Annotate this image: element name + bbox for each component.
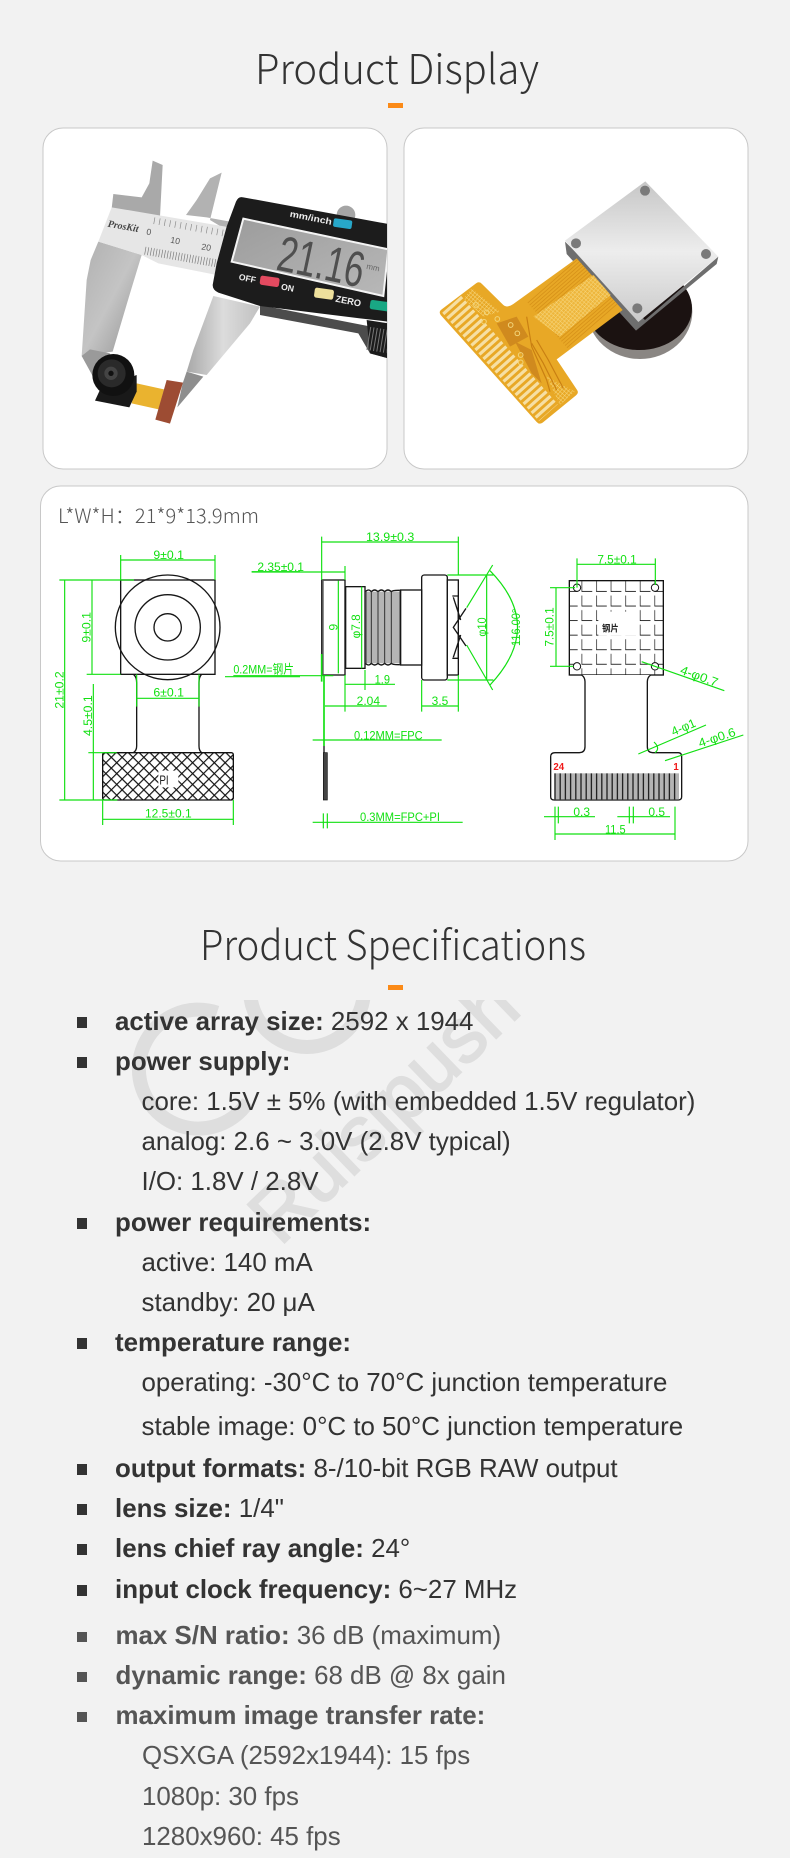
watermark logo and brand (132, 1000, 521, 1244)
chart: back view drawing: 0.3 (573, 805, 590, 819)
chart: back view drawing: 4-φ1 (669, 716, 698, 739)
specifications list: stable image: 0°C to 50°C junction temperature (142, 1413, 683, 1441)
panel: caliper photo: 21.16 (273, 225, 370, 298)
chart: side view drawing: 2.04 (357, 694, 380, 708)
chart: back view drawing: 11.5 (605, 822, 626, 836)
specifications list: 1080p: 30 fps (142, 1783, 299, 1811)
specifications list (77, 1008, 695, 1851)
chart: back view drawing: 4-φ0.7 (678, 663, 720, 690)
specifications list: standby: 20 μA (142, 1289, 315, 1317)
chart: front view drawing: 21±0.2 (52, 671, 66, 709)
icon: orange flex circuit (440, 258, 623, 424)
chart: side view drawing: 0.3MM=FPC+PI (360, 810, 440, 824)
specifications list: active: 140 mA (142, 1249, 313, 1277)
specifications list: power supply: (115, 1048, 290, 1076)
specifications list: lens size: 1/4" (115, 1495, 284, 1523)
chart: front view drawing: 12.5±0.1 (145, 807, 192, 821)
panel: caliper photo: mm/inch (289, 209, 333, 227)
accent bar (388, 103, 403, 108)
chart: front view drawing: 4.5±0.1 (81, 695, 95, 736)
chart: back view drawing: 4-φ0.6 (697, 725, 738, 750)
specifications list: dynamic range: 68 dB @ 8x gain (116, 1662, 506, 1690)
chart: side view drawing: 13.9±0.3 (366, 530, 414, 544)
chart: side view drawing: 0.12MM=FPC (354, 728, 423, 742)
chart: back view drawing: 7.5±0.1 (542, 607, 556, 647)
panel: caliper photo: mm (366, 262, 381, 273)
specifications list: core: 1.5V ± 5% (with embedded 1.5V regulator) (142, 1088, 695, 1116)
chart: side view drawing: 1.9 (375, 672, 390, 686)
chart: side view drawing: 116.00° (509, 609, 523, 646)
panel: dimension drawing (40, 486, 748, 861)
chart: back view drawing: 钢片 (602, 622, 619, 635)
specifications list: 1280x960: 45 fps (142, 1823, 341, 1851)
specifications list: max S/N ratio: 36 dB (maximum) (116, 1622, 501, 1650)
specifications list: QSXGA (2592x1944): 15 fps (142, 1742, 470, 1770)
icon: lens barrel (593, 285, 692, 359)
panel: caliper photo: OFF (238, 272, 257, 285)
specifications list: lens chief ray angle: 24° (115, 1535, 410, 1563)
chart: front view drawing: 9±0.1 (153, 548, 184, 562)
chart: back view drawing: 24 (553, 762, 565, 773)
specifications list: active array size: 2592 x 1944 (115, 1008, 473, 1036)
specifications list: temperature range: (115, 1329, 351, 1357)
icon: silver module plate (565, 181, 718, 331)
specifications list: output formats: 8-/10-bit RGB RAW output (115, 1455, 618, 1483)
title: Product Specifications: Product Specifications (200, 912, 586, 972)
chart: side view drawing: 2.35±0.1 (257, 560, 304, 574)
watermark logo and brand: Ruisipush (232, 962, 535, 1259)
chart: side view drawing: 3.5 (432, 694, 448, 708)
specifications list: analog: 2.6 ~ 3.0V (2.8V typical) (142, 1128, 511, 1156)
title: Product Display: Product Display (255, 36, 539, 96)
specifications list: maximum image transfer rate: (116, 1702, 485, 1730)
panel: caliper photo: ProsKit (107, 219, 141, 235)
chart: front view drawing: 6±0.1 (153, 686, 184, 700)
panel: caliper photo: 10 (170, 235, 181, 246)
panel: caliper photo: ON (280, 281, 295, 294)
panel: caliper photo: 20 (201, 241, 212, 253)
chart: side view drawing: φ7.8 (349, 614, 363, 638)
panel: caliper photo: 0 (146, 226, 152, 237)
text: overall dimensions: L*W*H：21*9*13.9mm (58, 500, 259, 529)
chart: back view drawing: 0.5 (648, 805, 665, 819)
specifications list: power requirements: (115, 1209, 371, 1237)
chart: side view drawing: 9 (326, 624, 340, 631)
chart: front view drawing: 0.2MM=钢片 (233, 662, 294, 676)
panel: flex cable camera photo (404, 128, 748, 469)
accent bar (388, 985, 403, 990)
specifications list: input clock frequency: 6~27 MHz (115, 1576, 517, 1604)
panel: caliper photo (43, 128, 391, 469)
chart: back view drawing: 7.5±0.1 (597, 552, 637, 566)
chart: front view drawing (52, 548, 300, 825)
chart: back view drawing: 1 (673, 762, 679, 773)
chart: front view drawing: PI (159, 774, 169, 788)
specifications list: I/O: 1.8V / 2.8V (142, 1168, 319, 1196)
panel: caliper photo: ZERO (335, 294, 362, 309)
chart: back view drawing (542, 552, 743, 840)
chart: side view drawing: φ10 (475, 617, 489, 637)
specifications list: operating: -30°C to 70°C junction temperature (142, 1369, 667, 1397)
chart: front view drawing: 9±0.1 (80, 612, 94, 643)
chart: side view drawing (233, 530, 523, 828)
